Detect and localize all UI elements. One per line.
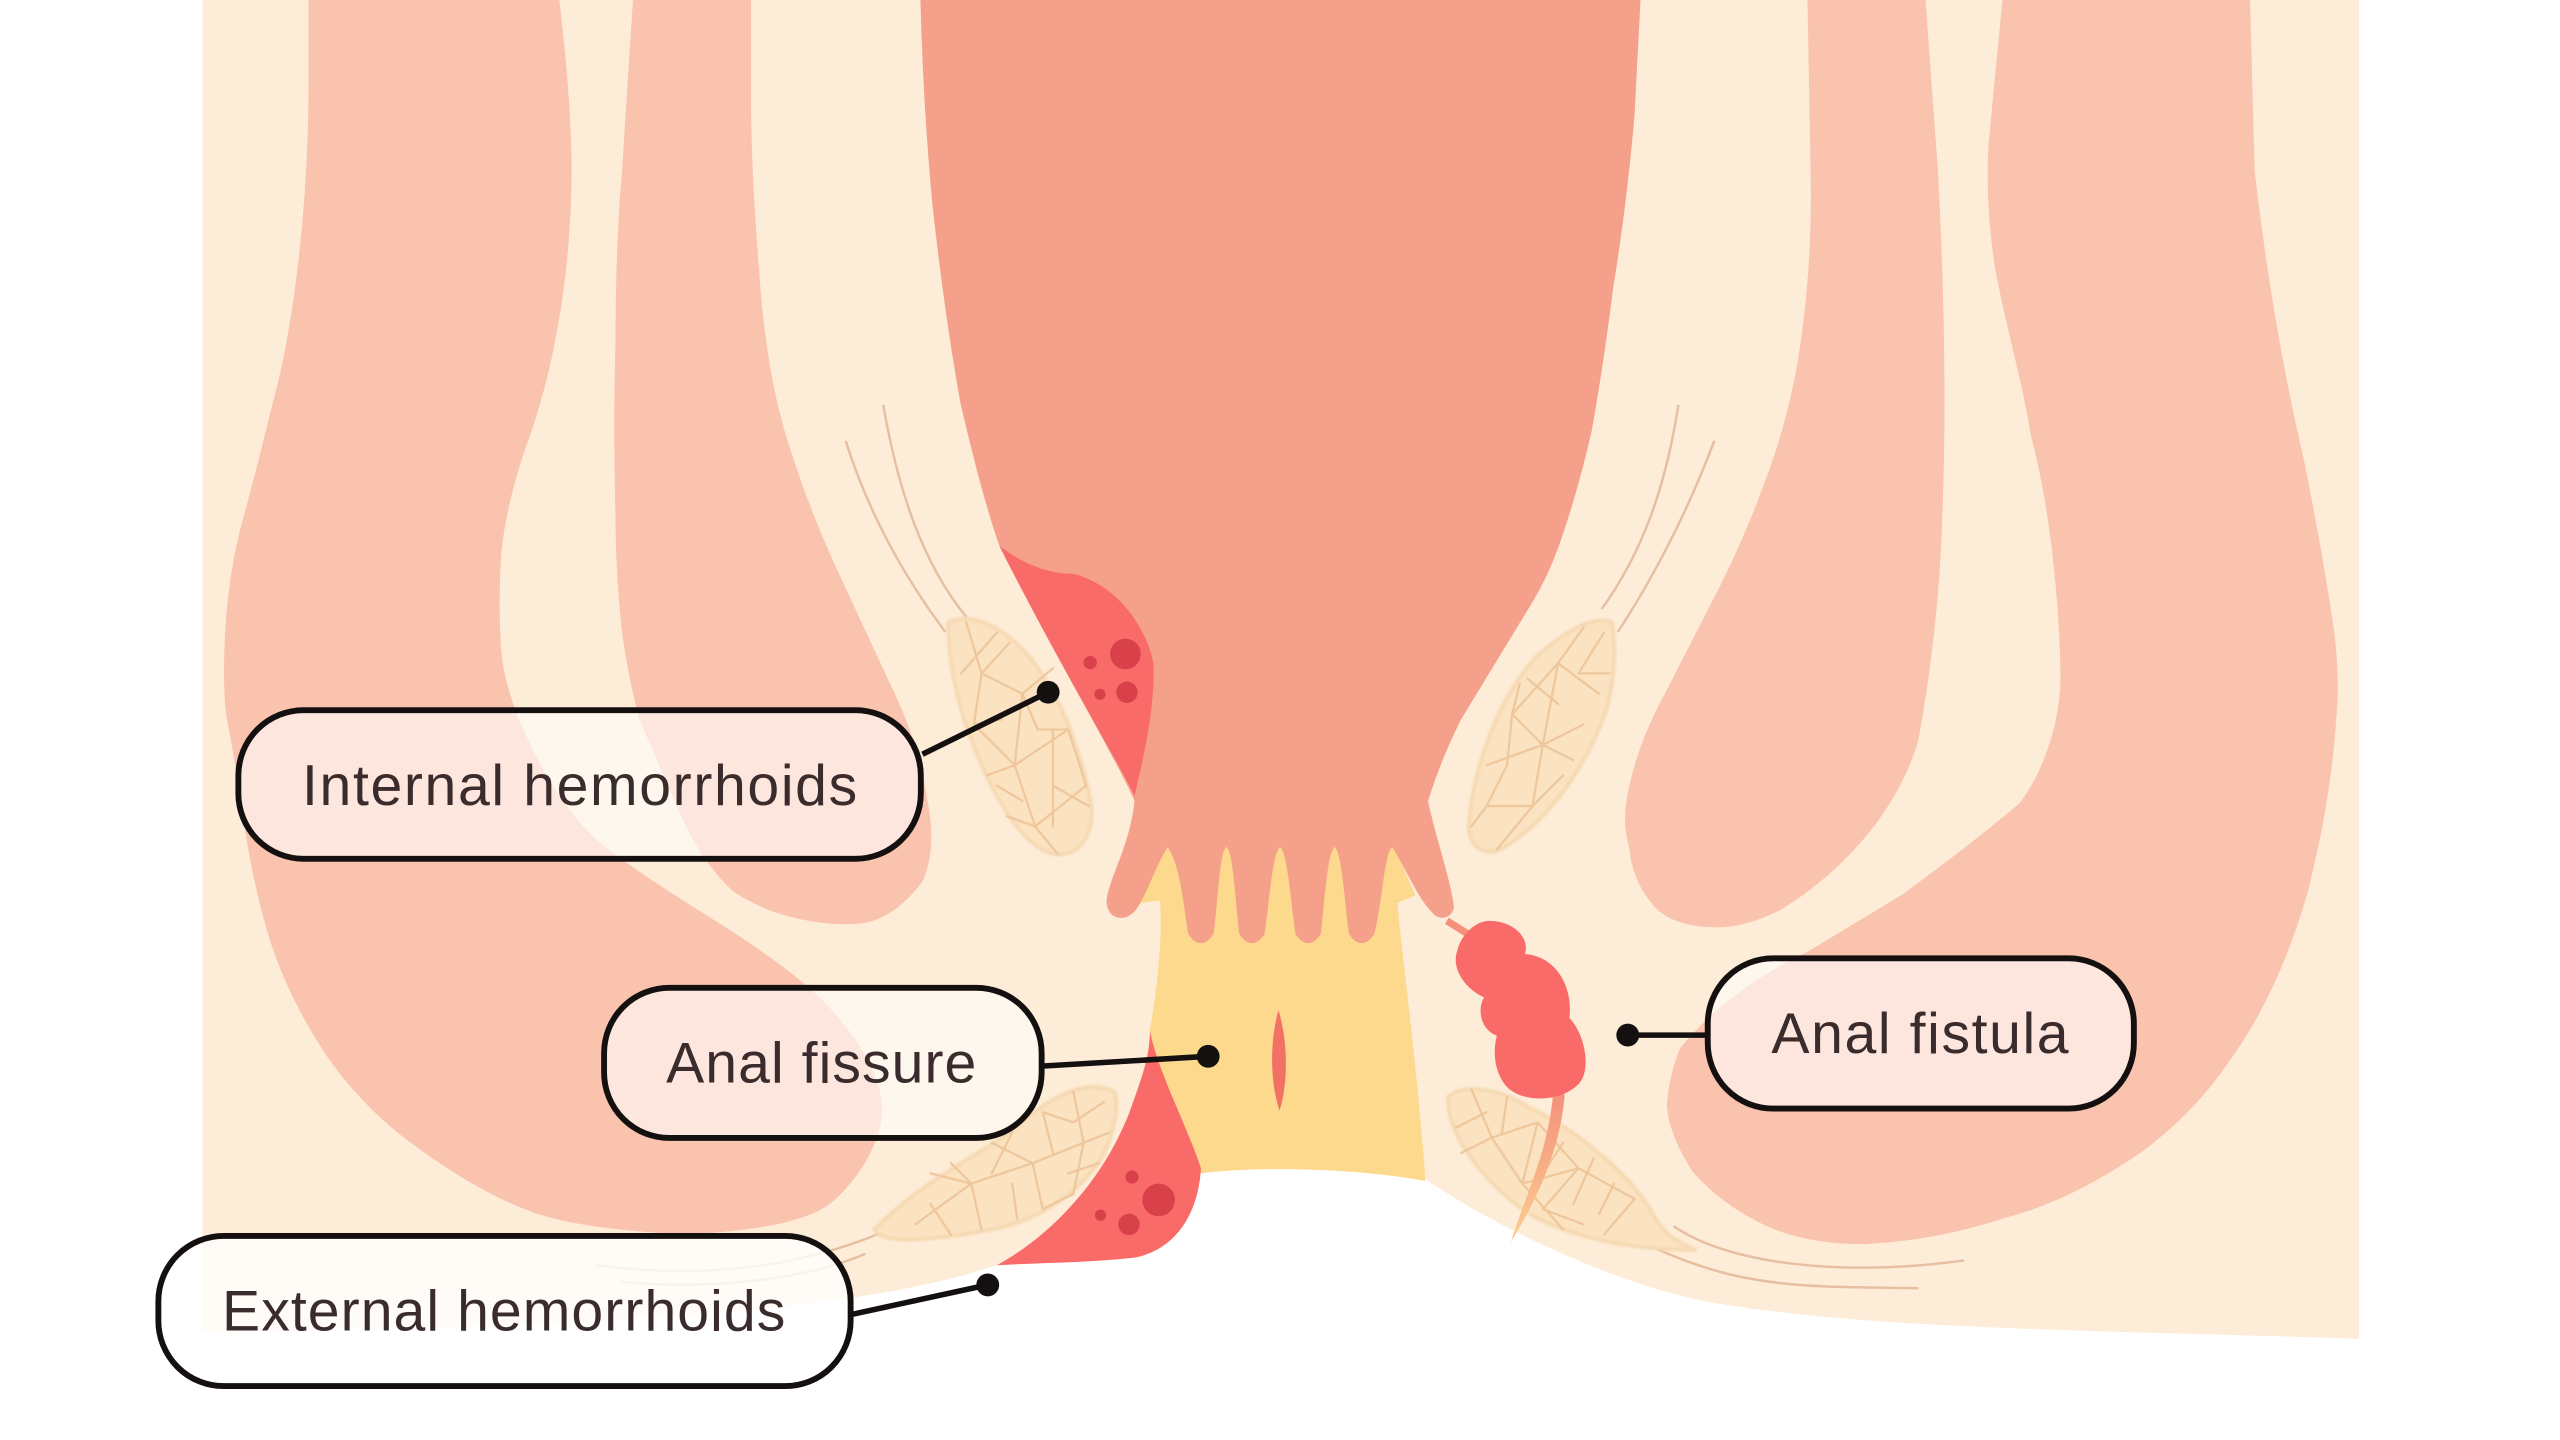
callout: external hemorrhoids <box>158 1236 999 1386</box>
anal canal <box>1140 842 1425 1181</box>
callout: internal hemorrhoids: Internal hemorrhoids <box>302 754 857 818</box>
callout: anal fissure <box>604 988 1220 1138</box>
external hemorrhoid <box>997 1031 1201 1265</box>
callout: external hemorrhoids: External hemorrhoids <box>222 1280 785 1344</box>
panel: anatomy cross-section <box>202 0 2359 1339</box>
right inner muscle <box>1625 0 1944 927</box>
anal fistula <box>1447 921 1586 1242</box>
left outer muscle <box>224 0 882 1234</box>
callout: anal fistula <box>1616 958 2134 1109</box>
gland: upper left <box>948 619 1092 855</box>
anal fissure slit <box>1272 1010 1286 1111</box>
gland: upper right <box>1469 621 1614 852</box>
callout: internal hemorrhoids <box>238 681 1060 859</box>
callout: anal fissure: Anal fissure <box>666 1031 976 1095</box>
central structures <box>874 0 1696 1265</box>
gland: lower left <box>874 1087 1116 1239</box>
left inner muscle <box>614 0 931 924</box>
gland: lower right <box>1448 1089 1696 1250</box>
soft tissue background <box>202 0 2359 1339</box>
thin nerve lines <box>596 405 1964 1288</box>
callout: anal fistula: Anal fistula <box>1771 1002 2069 1066</box>
internal hemorrhoid <box>999 546 1154 796</box>
right outer muscle <box>1667 0 2338 1244</box>
rectum <box>920 0 1641 943</box>
